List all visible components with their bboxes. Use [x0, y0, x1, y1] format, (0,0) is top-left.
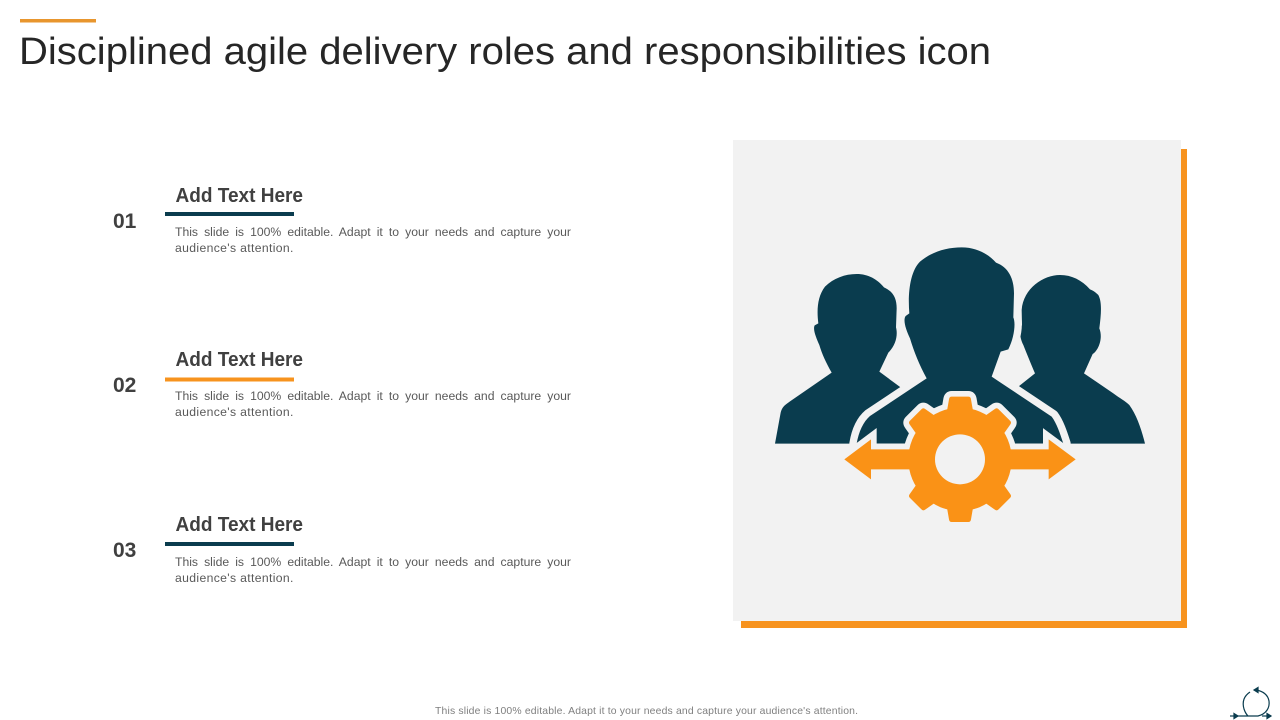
title accent line [20, 19, 96, 22]
item 01 rule [165, 212, 294, 216]
icon: right person [993, 275, 1145, 444]
item 01 heading: Add Text Here [176, 185, 303, 207]
item 03 number: 03 [113, 539, 136, 562]
icon: left person [775, 274, 927, 444]
footer note: This slide is 100% editable. Adapt it to your needs and capture your audience's attention. [435, 706, 858, 717]
icon: arrows [844, 439, 1076, 479]
item 01 body text [175, 224, 571, 255]
panel: grey background [733, 140, 1181, 621]
icon: centre person fill [857, 247, 1063, 444]
panel: orange L-shaped shadow [741, 149, 1187, 628]
item 01 body text: This slide is 100% editable. Adapt it to your needs and capture your [175, 224, 571, 238]
icon: team with gear and arrows [775, 247, 1145, 522]
item 03 body text [175, 554, 571, 585]
item 03 heading: Add Text Here [176, 514, 303, 536]
item 03 body text: audience's attention. [175, 571, 294, 585]
icon: gear [906, 397, 1014, 522]
icon: logo loop [1230, 688, 1271, 718]
item 02 rule [165, 378, 294, 382]
item 03 body text: This slide is 100% editable. Adapt it to your needs and capture your [175, 554, 571, 568]
item 01 body text: audience's attention. [175, 241, 294, 255]
item 02 heading: Add Text Here [176, 349, 303, 371]
icon: centre person outline [857, 247, 1063, 444]
icon: arrows outline [844, 439, 1076, 479]
item 02 number: 02 [113, 374, 136, 397]
item 02 body text: audience's attention. [175, 405, 294, 419]
icon: gear hole [935, 434, 985, 484]
title: Disciplined agile delivery roles and responsibilities icon [19, 31, 991, 73]
item 03 rule [165, 542, 294, 546]
icon: gear outline [906, 397, 1014, 522]
item 02 body text: This slide is 100% editable. Adapt it to your needs and capture your [175, 388, 571, 402]
icon: clear strip below people [849, 444, 1071, 464]
item 02 body text [175, 388, 571, 419]
item 01 number: 01 [113, 210, 137, 233]
